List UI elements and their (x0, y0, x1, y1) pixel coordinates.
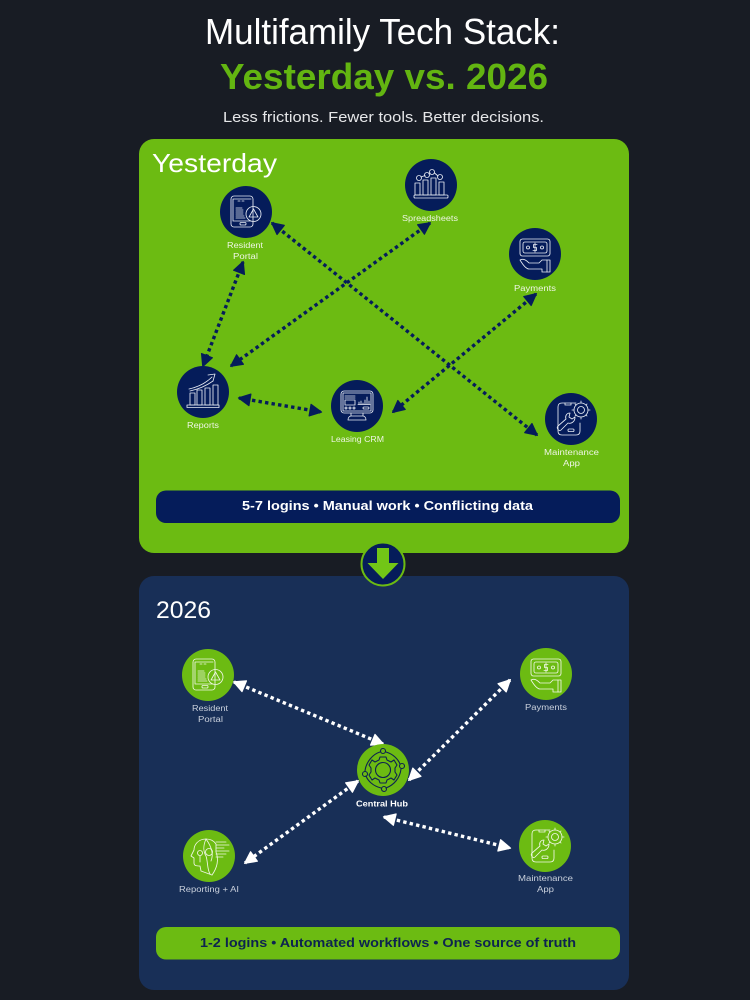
node: Maintenance App: Maintenance (544, 448, 600, 457)
node: Maintenance App: Maintenance (518, 874, 574, 883)
node: Central Hub: Central Hub (356, 800, 408, 808)
node: Resident Portal: Resident (192, 704, 229, 713)
node: Reporting + AI (179, 830, 239, 894)
icon: down arrow between panels (362, 542, 404, 586)
summary bar: 2026 (156, 927, 620, 960)
node: Maintenance App (518, 820, 574, 894)
node: Resident Portal: Resident (227, 241, 264, 250)
summary bar: Yesterday: 5-7 logins • Manual work • Conflicting data (242, 498, 534, 513)
title line 1: Multifamily Tech Stack: (205, 11, 560, 52)
node: Payments: Payments (525, 703, 567, 712)
node: Reports (177, 366, 229, 430)
arrows: tangled connections (203, 223, 537, 435)
node: Maintenance App (544, 393, 600, 468)
node: Resident Portal: Portal (233, 252, 258, 261)
node: Resident Portal (220, 186, 272, 261)
node: Maintenance App: App (563, 459, 581, 468)
summary bar: Yesterday (156, 490, 620, 523)
summary bar: 2026: 1-2 logins • Automated workflows • One source of truth (200, 935, 576, 950)
node: Payments (520, 648, 572, 712)
node: Maintenance App: App (537, 885, 555, 894)
node: Payments: Payments (514, 284, 556, 293)
panel: Yesterday (139, 139, 629, 553)
node: Spreadsheets: Spreadsheets (402, 214, 458, 223)
title line 2: Yesterday vs. 2026 (220, 56, 548, 97)
node: Spreadsheets (402, 159, 458, 223)
node: Leasing CRM (331, 380, 384, 444)
node: Reporting + AI: Reporting + AI (179, 885, 239, 894)
subtitle: Less frictions. Fewer tools. Better decisions. (223, 109, 544, 126)
node: Resident Portal (182, 649, 234, 724)
node: Payments (509, 228, 561, 293)
panel heading: 2026: 2026 (156, 597, 211, 624)
node: Resident Portal: Portal (198, 715, 223, 724)
title (205, 11, 560, 126)
panel heading: Yesterday: Yesterday (152, 148, 277, 178)
node: Reports: Reports (187, 421, 219, 430)
node: Central Hub (356, 744, 409, 808)
panel: 2026 (139, 576, 629, 990)
arrows: hub connections (234, 680, 510, 863)
node: Leasing CRM: Leasing CRM (331, 435, 384, 444)
